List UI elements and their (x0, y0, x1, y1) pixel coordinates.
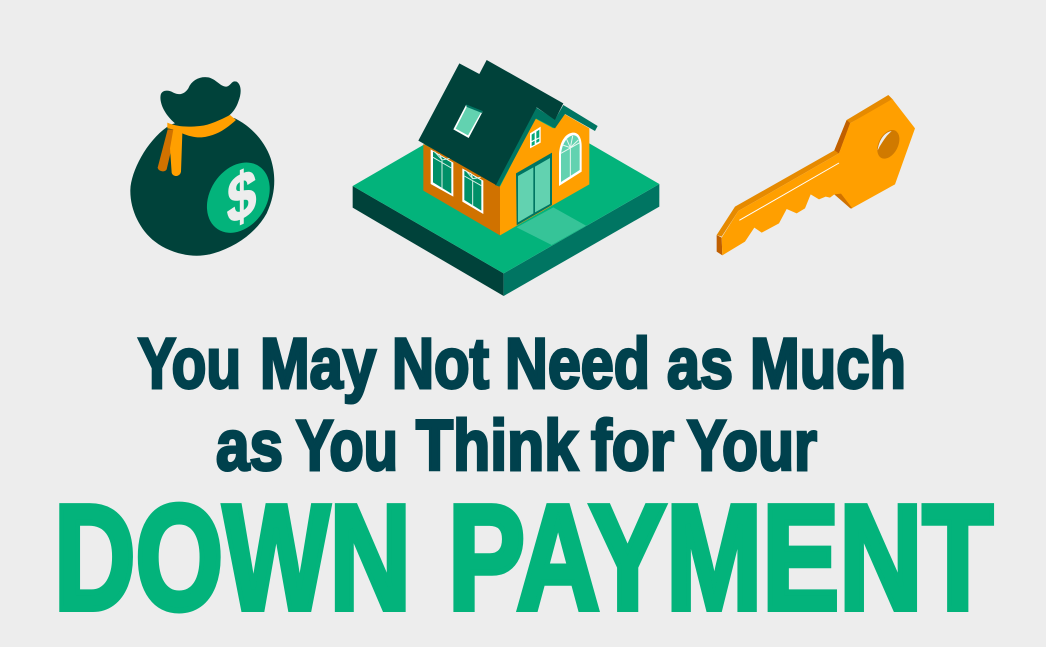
roof trim (495, 105, 598, 187)
title line two: Your (687, 406, 817, 486)
walkway (517, 207, 586, 245)
double door (516, 153, 552, 225)
title line one: Not (392, 324, 489, 404)
title line two: as (216, 406, 283, 486)
title line one: as (667, 324, 733, 404)
title line three: down payment: DOWN (54, 474, 411, 641)
title line two: You (296, 406, 398, 486)
plot top (353, 96, 659, 273)
title line one: You (138, 324, 241, 404)
right wall (500, 113, 589, 235)
left window two (462, 168, 483, 214)
key highlight (739, 163, 839, 220)
key face (722, 99, 915, 255)
icon: money bag (130, 77, 283, 256)
icon: house on green plot (353, 60, 659, 296)
title line one: May (260, 324, 376, 404)
key top edge (717, 95, 893, 237)
title line one: Need (505, 324, 650, 404)
key hole (873, 126, 904, 162)
bag top tuft (160, 77, 241, 127)
title line two: for (591, 406, 674, 486)
left wall (423, 144, 500, 235)
title line three: down payment (54, 474, 993, 641)
plot left side (353, 186, 504, 296)
left window one (431, 149, 453, 197)
skylight (453, 104, 483, 138)
title line two: Think (416, 406, 578, 486)
arched window (559, 133, 582, 186)
roof (418, 60, 563, 185)
bag body (130, 117, 274, 256)
icon: key (717, 95, 915, 255)
key notch shade (834, 194, 852, 208)
orange tie (158, 115, 236, 176)
small gable window (530, 127, 541, 148)
key tip shade (717, 235, 722, 255)
title (54, 324, 993, 641)
title line two (216, 406, 817, 486)
dollar coin (194, 151, 283, 245)
dollar coin: $ (227, 154, 256, 240)
plot right side (504, 184, 659, 296)
title line one (138, 324, 906, 404)
title line one: Much (750, 324, 906, 404)
key neck shade (834, 120, 850, 153)
